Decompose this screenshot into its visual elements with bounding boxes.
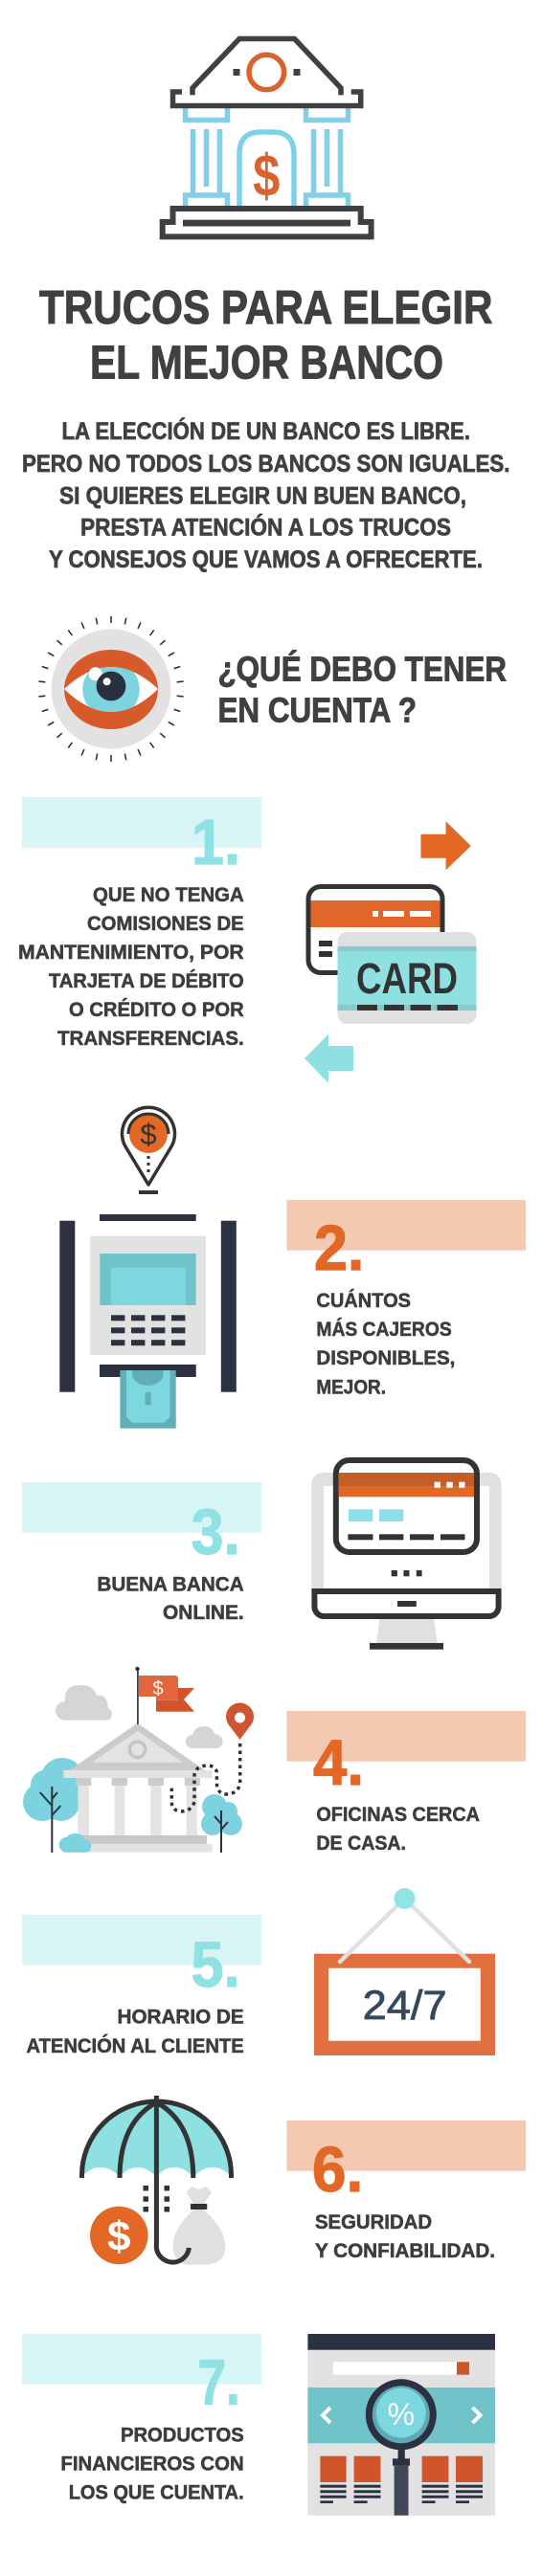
panel: item 3: ONLINE. [163,1601,244,1624]
panel: item 3 [22,1482,261,1624]
panel: item 1: TRANSFERENCIAS. [57,1027,244,1050]
icon: cards with arrows: CARD [356,954,458,1003]
panel: item 4: 4. [313,1727,364,1799]
panel: item 2: DISPONIBLES, [316,1346,455,1369]
icon: bank: $ [253,144,280,210]
intro text: PRESTA ATENCIÓN A LOS TRUCOS [80,513,451,542]
panel: item 7: FINANCIEROS CON [60,2453,244,2476]
panel: item 5: ATENCIÓN AL CLIENTE [27,2033,244,2057]
icon: bank [163,38,372,236]
panel: item 2: CUÁNTOS [316,1288,411,1312]
heading: que debo tener en cuenta [218,650,507,730]
title [39,282,492,389]
title: EL MEJOR BANCO [90,337,443,389]
intro text [22,416,509,573]
intro text: Y CONSEJOS QUE VAMOS A OFRECERTE. [49,546,483,573]
panel: item 2: 2. [314,1212,364,1284]
heading: que debo tener en cuenta: EN CUENTA ? [218,691,417,730]
icon: bank with trees and route: $ [152,1678,164,1699]
panel: item 1: QUE NO TENGA [93,883,244,906]
panel: item 3: 3. [192,1497,239,1568]
panel: item 6: 6. [312,2134,363,2206]
panel: item 4: DE CASA. [316,1832,406,1854]
icon: ATM [59,1214,237,1429]
panel: item 6: Y CONFIABILIDAD. [315,2239,495,2262]
panel: item 5 [22,1915,261,2057]
panel: item 1: MANTENIMIENTO, POR [18,941,244,964]
panel: item 3: BUENA BANCA [97,1573,244,1596]
panel: item 1: COMISIONES DE [87,912,244,935]
panel: item 4 [286,1711,526,1854]
panel: item 7 [22,2334,261,2504]
panel: item 1 [18,797,261,1050]
icon: map pin: $ [140,1118,157,1151]
heading: que debo tener en cuenta: ¿QUÉ DEBO TENER [218,650,507,689]
panel: item 6 [286,2121,526,2262]
icon: umbrella, coin and money bag: $ [107,2213,131,2260]
panel: item 7: 7. [197,2347,240,2419]
icon: umbrella, coin and money bag [82,2096,232,2265]
panel: item 1: TARJETA DE DÉBITO [49,968,244,992]
panel: item 6: SEGURIDAD [315,2210,432,2233]
intro text: SI QUIERES ELEGIR UN BUEN BANCO, [59,483,466,510]
icon: computer monitor [311,1460,502,1650]
icon: web page with magnifier [307,2334,495,2516]
panel: item 4: OFICINAS CERCA [316,1803,480,1826]
panel: item 2: MÁS CAJEROS [316,1317,452,1341]
panel: item 2 [286,1200,526,1399]
panel: item 1: O CRÉDITO O POR [69,997,244,1021]
icon: 24/7 sign [314,1888,495,2055]
icon: map pin [123,1107,174,1194]
panel: item 2: MEJOR. [316,1376,386,1399]
icon: cards with arrows [305,821,477,1083]
intro text: LA ELECCIÓN DE UN BANCO ES LIBRE. [61,416,470,445]
panel: item 7: LOS QUE CUENTA. [69,2481,244,2504]
icon: 24/7 sign: 24/7 [363,1983,447,2029]
panel: item 7: PRODUCTOS [121,2424,244,2447]
icon: bank with trees and route [23,1667,254,1853]
panel: item 1: 1. [192,807,240,878]
panel: item 5: HORARIO DE [117,2006,244,2029]
icon: eye [38,616,184,762]
icon: web page with magnifier: % [388,2397,415,2432]
panel: item 5: 5. [192,1929,239,2001]
